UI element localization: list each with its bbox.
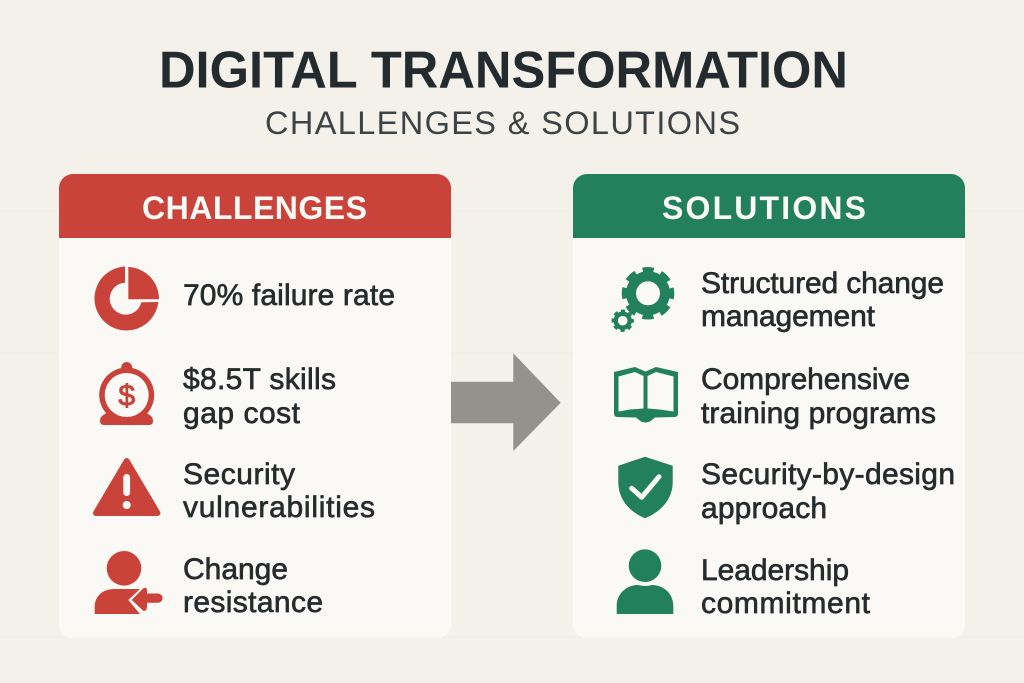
text: leadership commitment (701, 554, 871, 620)
text: leadership commitment: commitment (701, 587, 871, 620)
icon: open book (614, 367, 678, 422)
text: change resistance (183, 553, 323, 619)
text: security by design approach (701, 458, 955, 525)
text: skills gap cost: gap cost (183, 397, 301, 430)
title: DIGITAL TRANSFORMATION (159, 42, 848, 100)
text: security by design approach: approach (701, 492, 827, 525)
icon: warning triangle (96, 461, 157, 513)
icon: money clock (99, 362, 154, 425)
solutions header: SOLUTIONS (662, 190, 866, 226)
text: security vulnerabilities: vulnerabilities (183, 491, 375, 524)
panel: solutions (573, 174, 965, 638)
text: change resistance: Change (183, 553, 288, 586)
text: security vulnerabilities: Security (183, 458, 295, 491)
icon: leader person (617, 549, 673, 614)
challenges header: CHALLENGES (142, 190, 367, 226)
subtitle: CHALLENGES & SOLUTIONS (265, 105, 740, 141)
arrow (451, 353, 561, 451)
text: skills gap cost (183, 363, 336, 430)
text: failure rate: 70% failure rate (183, 279, 395, 312)
text: structured change management: Structured change (701, 267, 944, 300)
solutions header (573, 174, 965, 238)
icon: gears (613, 270, 672, 330)
panel: challenges (59, 174, 451, 638)
text: comprehensive training programs (701, 363, 936, 430)
text: comprehensive training programs: training programs (701, 397, 936, 430)
text: comprehensive training programs: Comprehensive (701, 363, 910, 396)
text: structured change management (701, 267, 944, 333)
text: skills gap cost: $8.5T skills (183, 363, 336, 396)
text: security by design approach: Security-by-design (701, 458, 955, 491)
text: security vulnerabilities (183, 458, 375, 524)
icon: shield check (618, 457, 673, 518)
text: change resistance: resistance (183, 586, 323, 619)
challenges header (59, 174, 451, 238)
icon: pie chart (94, 266, 159, 330)
text: structured change management: management (701, 300, 876, 333)
icon: money clock: $ (118, 380, 135, 412)
text: leadership commitment: Leadership (701, 554, 849, 587)
icon: person resisting (95, 551, 163, 614)
